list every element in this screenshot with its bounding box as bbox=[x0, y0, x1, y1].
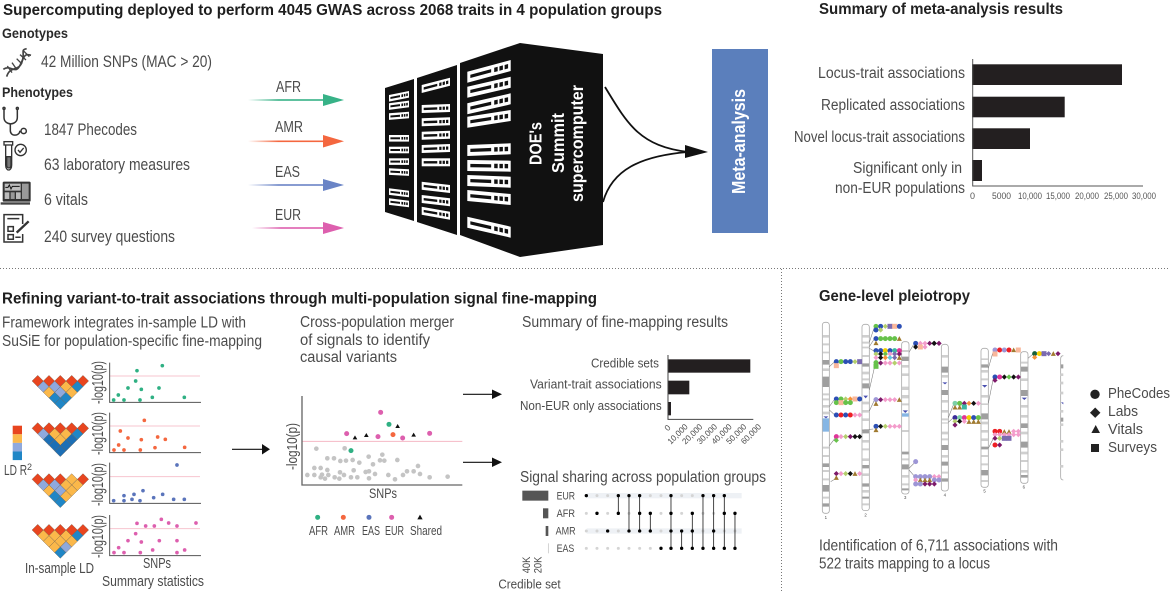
y-axis labels: -log10(p) bbox=[90, 463, 107, 506]
chromosome 3 bbox=[902, 342, 909, 500]
chromosome 2 bbox=[862, 324, 869, 517]
arrow: EUR bbox=[252, 207, 344, 234]
arrow: EUR: EUR bbox=[275, 207, 301, 224]
text: framework bbox=[2, 314, 262, 350]
bar chart: fine-mapping: Non-EUR only associations bbox=[520, 398, 662, 413]
text: framework: Framework integrates in-sample LD with bbox=[2, 314, 246, 332]
rack label: Summit bbox=[548, 113, 568, 173]
chromosome 2: 2 bbox=[864, 512, 867, 517]
bar chart: fine-mapping: Variant-trait associations bbox=[530, 377, 662, 392]
merged plot legend: EUR bbox=[385, 524, 404, 538]
upset plot: EAS bbox=[557, 543, 574, 555]
box: meta-analysis bbox=[712, 49, 768, 233]
icon: survey bbox=[4, 215, 29, 242]
arrow: AMR bbox=[248, 119, 344, 148]
arrow: to merged plot bbox=[232, 444, 270, 454]
text: cross-population: Cross-population merger bbox=[300, 314, 454, 331]
text: SNPs: 42 Million SNPs (MAC > 20) bbox=[41, 53, 212, 71]
upset plot: AMR bbox=[556, 526, 576, 538]
chromosome marker legend: Labs bbox=[1108, 403, 1138, 420]
bar chart: fine-mapping: 30,000 bbox=[695, 421, 719, 446]
LD triangle 2 bbox=[32, 423, 89, 457]
merged scatter plot bbox=[302, 396, 462, 485]
merged plot legend: AFR bbox=[309, 524, 328, 538]
bar chart: fine-mapping bbox=[520, 355, 763, 446]
upset plot: EUR bbox=[557, 490, 575, 502]
bar chart: fine-mapping: 0 bbox=[662, 422, 673, 433]
chromosome 4: 4 bbox=[944, 492, 947, 497]
bar chart: meta-analysis: 0 bbox=[970, 191, 975, 201]
arrow: AMR: AMR bbox=[275, 119, 303, 136]
upset plot: 40K bbox=[521, 556, 533, 573]
label: SNPs: SNPs bbox=[143, 556, 171, 572]
bar chart: meta-analysis: 5000 bbox=[992, 191, 1011, 201]
heading: fine-mapping: Refining variant-to-trait associations through multi-population signal fine-mapping bbox=[2, 290, 597, 308]
chromosome marker legend: Surveys bbox=[1108, 439, 1157, 456]
text: cross-population: of signals to identify bbox=[300, 332, 430, 349]
LD triangle 3 bbox=[32, 474, 89, 508]
merged plot legend: Shared bbox=[410, 524, 442, 538]
gene markers on chromosomes 1 to 3 bbox=[834, 324, 942, 487]
heading: signal sharing: Signal sharing across population groups bbox=[520, 469, 766, 486]
rack label: DOE's bbox=[526, 122, 546, 165]
bar chart: meta-analysis: non-EUR populations bbox=[835, 180, 965, 197]
LD legend: 2 bbox=[27, 462, 32, 472]
text: survey questions: 240 survey questions bbox=[44, 228, 175, 246]
LD triangle 1 bbox=[32, 375, 89, 409]
heading: meta-analysis summary: Summary of meta-analysis results bbox=[819, 1, 1063, 18]
chromosomes 1 to 3 with markers bbox=[822, 322, 942, 520]
connectors bbox=[948, 351, 1033, 448]
y-axis labels: -log10(p) bbox=[90, 361, 107, 404]
icon: test tube bbox=[4, 142, 26, 170]
chromosome 7 partial bbox=[1061, 356, 1063, 480]
LD legend bbox=[4, 426, 32, 479]
text: vitals: 6 vitals bbox=[44, 191, 88, 209]
bar chart: fine-mapping: 40,000 bbox=[709, 421, 734, 446]
upset plot: Credible set bbox=[498, 577, 561, 592]
bar chart: meta-analysis: Locus-trait associations bbox=[818, 65, 965, 82]
icon: stethoscope bbox=[3, 107, 26, 135]
text: framework: SuSiE for population-specific fine-mapping bbox=[2, 333, 262, 350]
scatter: EUR bbox=[109, 515, 201, 556]
chromosome 5 bbox=[981, 348, 988, 494]
bar chart: meta-analysis: 10,000 bbox=[1018, 191, 1042, 201]
text: cross-population: causal variants bbox=[300, 349, 397, 366]
y-axis labels: -log10(p) bbox=[90, 515, 107, 558]
merged plot legend bbox=[309, 515, 442, 538]
chromosome 1 bbox=[822, 322, 829, 520]
icon: monitor bbox=[1, 182, 31, 205]
chromosomes 4 to 7 with markers bbox=[931, 341, 1063, 497]
chromosome marker legend bbox=[1090, 385, 1170, 456]
text: identification summary bbox=[819, 538, 1058, 572]
text: identification summary: Identification of 6,711 associations with bbox=[819, 538, 1058, 554]
chromosome 3: 3 bbox=[904, 495, 907, 500]
arrow: AFR: AFR bbox=[276, 79, 301, 96]
arrow: EAS bbox=[248, 164, 344, 191]
arrow: AFR bbox=[248, 79, 344, 106]
text: phecodes: 1847 Phecodes bbox=[44, 121, 137, 139]
bar chart: fine-mapping: 20,000 bbox=[680, 421, 705, 446]
bar chart: fine-mapping: Credible sets bbox=[591, 355, 659, 370]
scatter: EAS bbox=[109, 463, 201, 503]
scatter: AMR bbox=[109, 413, 201, 453]
label: summary statistics: Summary statistics bbox=[102, 574, 204, 590]
LD legend: LD R bbox=[4, 463, 27, 479]
text: fine-mapping results heading: Summary of fine-mapping results bbox=[522, 314, 728, 331]
arrow: to fine-mapping results bbox=[463, 390, 502, 399]
upset plot: 20K bbox=[532, 556, 544, 573]
supercomputer racks bbox=[385, 43, 603, 257]
bar chart: fine-mapping: 10,000 bbox=[665, 421, 690, 446]
heading: phenotypes: Phenotypes bbox=[2, 84, 73, 100]
rack label: supercomputer bbox=[567, 85, 587, 202]
LD triangle 4 bbox=[32, 524, 89, 558]
upset plot bbox=[498, 490, 742, 592]
arrow: merge to meta-analysis bbox=[603, 87, 708, 202]
text: cross-population bbox=[300, 314, 454, 366]
connectors bbox=[829, 328, 914, 482]
text: identification summary: 522 traits mapping to a locus bbox=[819, 556, 990, 572]
arrow: EAS: EAS bbox=[275, 164, 300, 181]
text: lab measures: 63 laboratory measures bbox=[44, 156, 190, 174]
box: meta-analysis: Meta-analysis bbox=[729, 89, 749, 194]
rack label bbox=[526, 85, 587, 202]
bar chart: meta-analysis bbox=[794, 59, 1156, 201]
label: in-sample LD: In-sample LD bbox=[25, 561, 94, 577]
bar chart: meta-analysis: 25,000 bbox=[1104, 191, 1128, 201]
bar chart: meta-analysis: 30,000 bbox=[1132, 191, 1156, 201]
y-axis labels: -log10(p) bbox=[90, 412, 107, 455]
bar chart: fine-mapping: 50,000 bbox=[724, 421, 749, 446]
bar chart: meta-analysis: Replicated associations bbox=[821, 97, 965, 114]
chromosome 4 bbox=[941, 344, 948, 497]
heading: gene-level pleiotropy: Gene-level pleiotropy bbox=[819, 288, 970, 305]
chromosome 1: 1 bbox=[825, 515, 828, 520]
bar chart: fine-mapping: 60,000 bbox=[739, 421, 763, 446]
merged plot y label: -log10(p) bbox=[284, 423, 301, 470]
chromosome 6: 6 bbox=[1023, 485, 1026, 490]
merged plot legend: AMR bbox=[334, 524, 355, 538]
gene markers on chromosomes 4 to 6 bbox=[931, 341, 1061, 448]
bar chart: meta-analysis: 15,000 bbox=[1046, 191, 1070, 201]
bar chart: meta-analysis: 20,000 bbox=[1075, 191, 1099, 201]
chromosome marker legend: Vitals bbox=[1108, 421, 1143, 438]
bar chart: meta-analysis: Significant only in bbox=[853, 160, 962, 177]
chromosome 6 bbox=[1021, 352, 1028, 490]
heading: genotypes: Genotypes bbox=[2, 25, 68, 41]
merged plot legend: EAS bbox=[362, 524, 380, 538]
y-axis labels bbox=[90, 361, 107, 558]
chromosome 5: 5 bbox=[983, 489, 986, 494]
upset plot: AFR bbox=[557, 508, 575, 520]
arrow: to signal sharing bbox=[463, 458, 502, 467]
scatter: AFR bbox=[109, 363, 201, 402]
title: supercomputing: Supercomputing deployed to perform 4045 GWAS across 2068 traits in 4 population groups bbox=[3, 2, 662, 19]
icon: DNA bbox=[3, 49, 31, 77]
bar chart: meta-analysis: Novel locus-trait associations bbox=[794, 129, 965, 146]
merged plot x label: SNPs bbox=[369, 485, 397, 501]
